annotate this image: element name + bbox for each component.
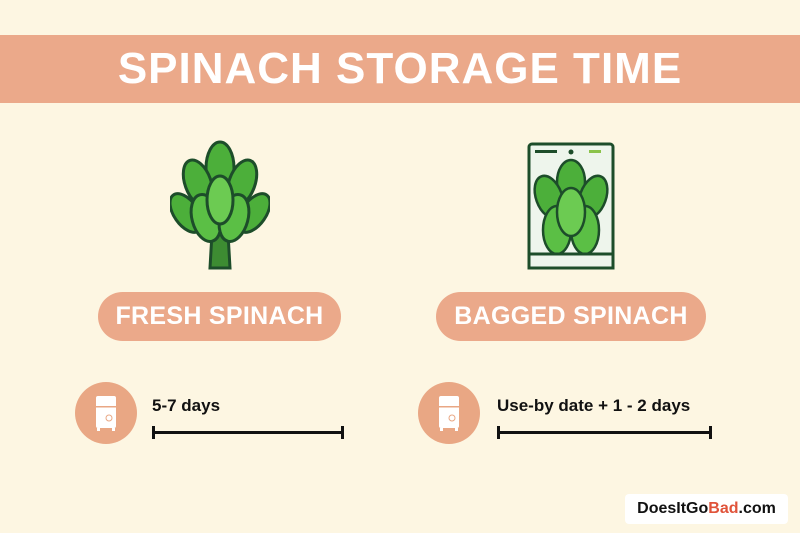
logo: Bad <box>708 500 738 517</box>
bar: bagged <box>497 431 712 434</box>
bar: fresh <box>152 431 344 434</box>
text: bagged time: Use-by date + 1 - 2 days <box>497 396 690 415</box>
logo: DoesItGo .com <box>637 500 776 517</box>
label: fresh spinach <box>98 292 341 341</box>
title <box>0 35 800 103</box>
text: fresh time: 5-7 days <box>152 396 220 415</box>
icon: fridge bagged <box>418 382 480 444</box>
label: bagged spinach: BAGGED SPINACH <box>454 302 688 330</box>
logo <box>625 494 788 524</box>
icon: fridge fresh <box>75 382 137 444</box>
icon: fresh spinach <box>170 140 270 270</box>
icon: bagged spinach <box>528 142 614 270</box>
title: SPINACH STORAGE TIME <box>118 44 682 93</box>
label: fresh spinach: FRESH SPINACH <box>115 302 324 330</box>
label: bagged spinach <box>436 292 706 341</box>
